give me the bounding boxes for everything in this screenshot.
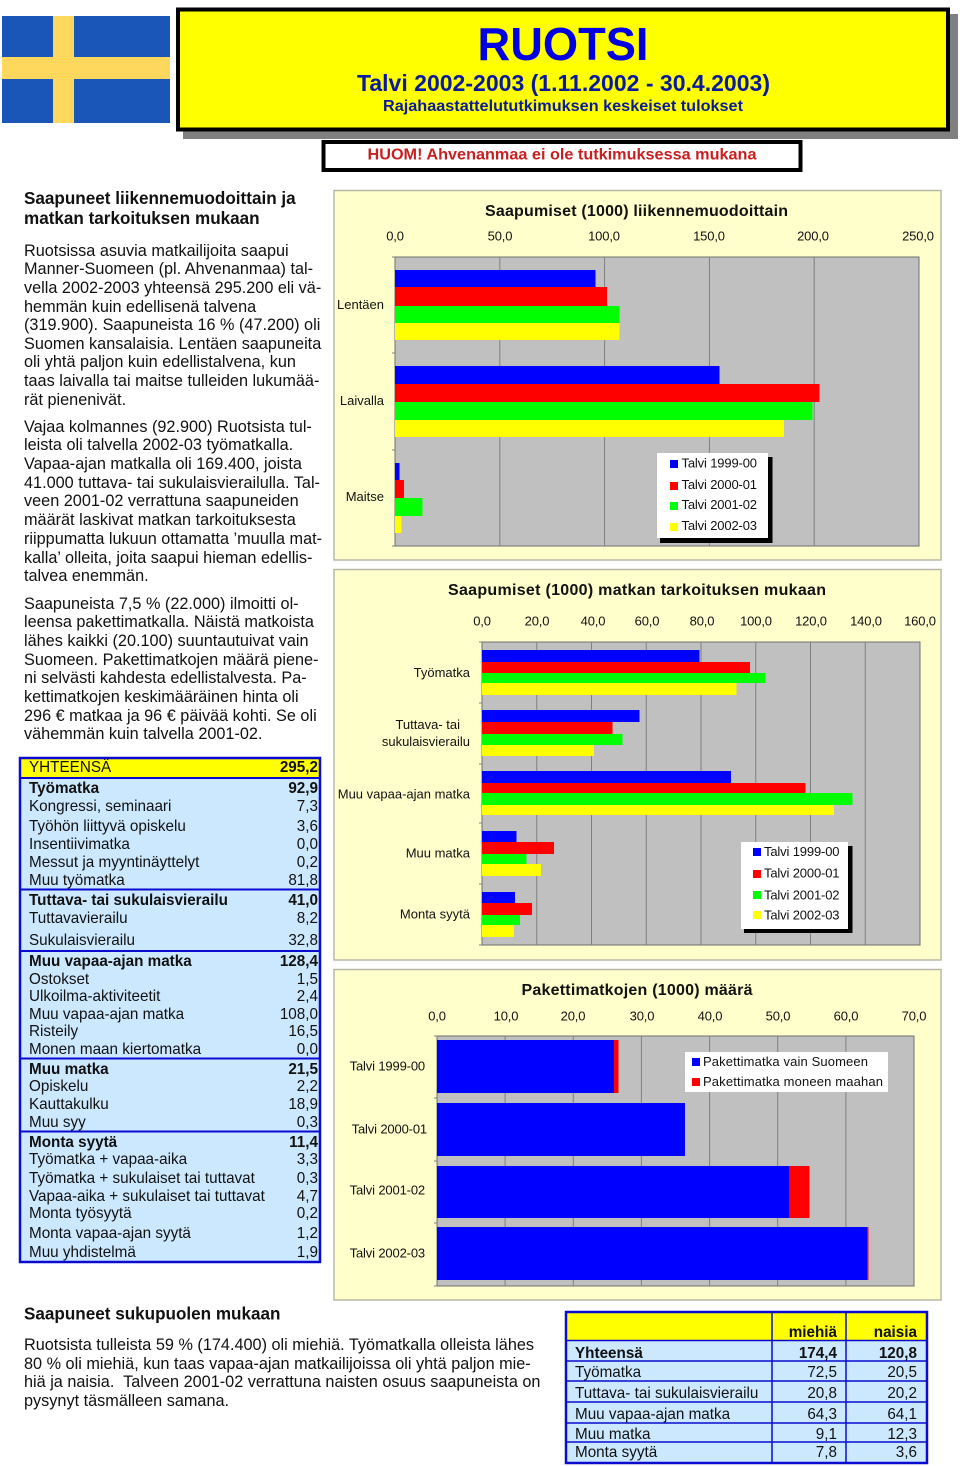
legend: Talvi 2002-03	[682, 518, 757, 533]
text block: arrivals by gender	[24, 1336, 540, 1410]
table: arrivals by purpose of travel: Insentiivimatka	[29, 836, 130, 853]
table: arrivals by purpose of travel: Messut ja myyntinäyttelyt	[29, 854, 200, 871]
table: arrivals by gender: 174,4	[799, 1345, 838, 1362]
table: arrivals by purpose of travel: Muu matka	[29, 1061, 109, 1078]
category labels	[350, 1058, 427, 1260]
notice box	[324, 142, 800, 170]
table: arrivals by purpose of travel: Vapaa-aika + sukulaiset tai tuttavat	[29, 1188, 266, 1205]
bars: Laivalla	[395, 366, 820, 437]
x axis labels: 10,0	[494, 1008, 518, 1024]
table: arrivals by gender: Työmatka	[575, 1364, 642, 1381]
x axis labels	[473, 614, 936, 628]
heading: arrivals by mode and purpose	[24, 189, 296, 228]
category labels: Työmatka	[414, 665, 471, 680]
heading: arrivals by gender: Saapuneet sukupuolen mukaan	[24, 1304, 280, 1324]
text block: travel purpose	[24, 418, 322, 585]
table: arrivals by gender: Yhteensä	[575, 1345, 643, 1362]
x axis labels: 30,0	[630, 1008, 654, 1024]
text block: travel purpose: Vajaa kolmannes (92.900) Ruotsista tul-	[24, 418, 312, 436]
text block: arrivals: (319.900). Saapuneista 16 % (47.200) oli	[24, 316, 320, 334]
legend: Talvi 1999-00	[764, 844, 839, 859]
category labels: Muu matka	[406, 846, 471, 860]
table: arrivals by purpose of travel: 295,2	[280, 759, 318, 776]
x axis labels: 200,0	[797, 228, 829, 244]
table: arrivals by purpose of travel: 1,2	[297, 1225, 318, 1242]
x axis labels: 80,0	[690, 614, 714, 628]
text block: travel purpose: 41.000 tuttava- tai sukulaisvierailulla. Tal-	[24, 474, 320, 492]
x axis labels: 0,0	[473, 614, 491, 628]
table: arrivals by purpose of travel: 32,8	[288, 932, 318, 949]
text block: package tours: vähemmän kuin talvella 2001-02.	[24, 725, 262, 743]
text block: arrivals: taas laivalla tai maitse tulleiden lukumää-	[24, 372, 319, 390]
table: arrivals by purpose of travel	[20, 758, 320, 1262]
table: arrivals by purpose of travel: Monta syytä	[29, 1134, 118, 1151]
x axis labels: 140,0	[850, 614, 882, 628]
x axis labels: 20,0	[525, 614, 549, 628]
table: arrivals by purpose of travel: Kongressi, seminaari	[29, 798, 171, 815]
category labels: Tuttava- tai	[395, 717, 460, 732]
text block: arrivals: vella 2002-2003 yhteensä 295.200 eli vä-	[24, 279, 321, 297]
table: arrivals by purpose of travel: 1,5	[297, 971, 318, 988]
table: arrivals by gender: 3,6	[896, 1444, 917, 1461]
table: arrivals by purpose of travel: Ostokset	[29, 971, 90, 988]
table: arrivals by purpose of travel: 108,0	[280, 1006, 318, 1023]
table: arrivals by purpose of travel: Monta vapaa-ajan syytä	[29, 1225, 191, 1242]
category labels: sukulaisvierailu	[382, 734, 470, 749]
bars: Talvi 2000-01	[437, 1103, 685, 1156]
table: arrivals by purpose of travel: Muu yhdistelmä	[29, 1244, 136, 1261]
table: arrivals by purpose of travel: Kauttakulku	[29, 1096, 109, 1113]
legend	[741, 842, 852, 933]
text block: package tours: ni selvästi kahdesta edellistalvesta. Pa-	[24, 669, 307, 687]
table: arrivals by purpose of travel: Sukulaisvierailu	[29, 932, 135, 949]
text block: package tours: Suomeen. Pakettimatkojen määrä piene-	[24, 651, 318, 669]
category labels: Laivalla	[340, 393, 385, 408]
table: arrivals by purpose of travel: 8,2	[297, 910, 318, 927]
x axis labels: 20,0	[561, 1008, 585, 1024]
category labels	[337, 297, 385, 504]
bars: Lentäen	[395, 270, 620, 340]
legend: Talvi 2001-02	[682, 497, 757, 512]
text block: arrivals: rät pienenivät.	[24, 391, 126, 409]
x axis labels: 250,0	[902, 228, 934, 244]
table: arrivals by purpose of travel: 0,0	[297, 1041, 318, 1058]
bars: Muu matka	[482, 831, 554, 876]
heading: arrivals by mode and purpose: Saapuneet liikennemuodoittain ja	[24, 189, 296, 208]
table: arrivals by purpose of travel: 1,9	[297, 1244, 318, 1261]
legend: Pakettimatka moneen maahan	[703, 1074, 883, 1089]
table: arrivals by purpose of travel: 4,7	[297, 1188, 318, 1205]
panel: chart arrivals by mode of transport	[334, 190, 941, 560]
table: arrivals by purpose of travel: Monta työsyytä	[29, 1205, 132, 1222]
notice box: HUOM! Ahvenanmaa ei ole tutkimuksessa mukana	[368, 146, 757, 164]
table: arrivals by gender: Muu vapaa-ajan matka	[575, 1406, 731, 1423]
table: arrivals by purpose of travel: 0,2	[297, 1205, 318, 1222]
table: arrivals by purpose of travel: 21,5	[288, 1061, 319, 1078]
table: arrivals by gender: 72,5	[807, 1364, 837, 1381]
x axis labels: 0,0	[428, 1008, 446, 1024]
text block: arrivals: hemmän kuin edellisenä talvena	[24, 298, 257, 316]
chart title: Saapumiset (1000) matkan tarkoituksen mukaan	[448, 582, 826, 599]
plot area	[479, 642, 920, 945]
bars: Talvi 2001-02	[437, 1166, 810, 1218]
table: arrivals by purpose of travel: Työmatka + sukulaiset tai tuttavat	[29, 1170, 256, 1187]
x axis labels: 50,0	[488, 228, 512, 244]
chart title: Saapumiset (1000) liikennemuodoittain	[485, 203, 788, 220]
text block: arrivals: oli yhtä paljon kuin edellistalvena, kun	[24, 353, 296, 371]
plot area	[392, 257, 919, 546]
table: arrivals by purpose of travel: Opiskelu	[29, 1078, 88, 1095]
x axis labels: 50,0	[766, 1008, 790, 1024]
table: arrivals by purpose of travel: Ulkoilma-aktiviteetit	[29, 988, 161, 1005]
category labels: Monta syytä	[400, 906, 471, 922]
plot area	[434, 1036, 914, 1286]
table: arrivals by gender: 7,8	[816, 1444, 837, 1461]
text block: arrivals by gender: pysynyt täsmälleen samana.	[24, 1392, 229, 1410]
table: arrivals by purpose of travel: Työmatka	[29, 780, 100, 797]
x axis labels: 60,0	[635, 614, 659, 628]
table: arrivals by purpose of travel: Muu syy	[29, 1114, 86, 1131]
legend	[685, 1052, 888, 1092]
x axis labels: 40,0	[698, 1008, 722, 1024]
bars: Talvi 1999-00	[437, 1040, 618, 1093]
table: arrivals by gender: naisia	[874, 1324, 918, 1341]
table: arrivals by gender: Monta syytä	[575, 1444, 658, 1461]
table: arrivals by purpose of travel: 16,5	[288, 1023, 318, 1040]
text block: travel purpose: leista oli talvella 2002-03 työmatkalla.	[24, 436, 293, 454]
table: arrivals by purpose of travel: Työhön liittyvä opiskelu	[29, 818, 186, 835]
text block: arrivals by gender: Ruotsista tulleista 59 % (174.400) oli miehiä. Työmatkalla olleista lähes	[24, 1336, 534, 1354]
text block: package tours: kettimatkojen keskimääräinen hinta oli	[24, 688, 299, 706]
heading: arrivals by mode and purpose: matkan tarkoituksen mukaan	[24, 209, 260, 228]
icon: Swedish flag	[2, 16, 170, 123]
table: arrivals by purpose of travel: 0,0	[297, 836, 318, 853]
table: arrivals by purpose of travel: Monen maan kiertomatka	[29, 1041, 202, 1058]
x axis labels: 100,0	[740, 614, 772, 628]
title banner: RUOTSI	[478, 18, 648, 70]
title banner: Talvi 2002-2003 (1.11.2002 - 30.4.2003)	[357, 70, 770, 96]
panel: chart arrivals by purpose of travel	[334, 570, 941, 960]
table: arrivals by gender: Tuttava- tai sukulaisvierailu	[575, 1385, 758, 1402]
table: arrivals by gender: Muu matka	[575, 1426, 651, 1443]
x axis labels	[428, 1008, 926, 1024]
table: arrivals by purpose of travel: 18,9	[288, 1096, 318, 1113]
text block: arrivals: Suomen kansalaisia. Lentäen saapuneita	[24, 335, 322, 353]
table: arrivals by purpose of travel: 7,3	[297, 798, 318, 815]
x axis labels: 160,0	[904, 614, 936, 628]
legend: Talvi 2001-02	[764, 888, 839, 902]
table: arrivals by purpose of travel: 2,2	[297, 1078, 318, 1095]
x axis labels: 120,0	[795, 614, 827, 628]
table: arrivals by purpose of travel: Tuttavavierailu	[29, 910, 128, 927]
table: arrivals by purpose of travel: 128,4	[280, 953, 319, 970]
x axis labels: 150,0	[693, 228, 725, 244]
x axis labels	[386, 228, 934, 244]
legend: Talvi 2000-01	[764, 866, 839, 880]
table: arrivals by purpose of travel: 3,6	[297, 818, 318, 835]
category labels: Talvi 2002-03	[350, 1246, 425, 1260]
category labels: Talvi 1999-00	[350, 1058, 425, 1074]
category labels: Muu vapaa-ajan matka	[338, 786, 471, 802]
text block: travel purpose: riippumatta lukuun ottamatta ’muulla mat-	[24, 530, 322, 548]
bars: Talvi 2002-03	[437, 1227, 868, 1280]
text block: travel purpose: Vapaa-ajan matkalla oli 169.400, joista	[24, 455, 303, 473]
text block: package tours: leensa pakettimatkalla. Näistä matkoista	[24, 613, 315, 631]
legend: Talvi 2002-03	[764, 908, 839, 922]
category labels: Lentäen	[337, 297, 384, 312]
text block: package tours: lähes kaikki (20.100) suuntautuivat vain	[24, 632, 309, 650]
bars: Tuttava- tai sukulaisvierailu	[482, 710, 640, 756]
table: arrivals by purpose of travel: 92,9	[288, 780, 318, 797]
text block: arrivals by gender: hiä ja naisia. Talveen 2001-02 verrattuna naisten osuus saapuneista on	[24, 1373, 540, 1391]
bars: Monta syytä	[482, 892, 532, 937]
legend: Pakettimatka vain Suomeen	[703, 1054, 868, 1069]
table: arrivals by purpose of travel: 0,2	[297, 854, 318, 871]
text block: arrivals by gender: 80 % oli miehiä, kun taas vapaa-ajan matkailijoissa oli yhtä paljon mie-	[24, 1355, 531, 1373]
table: arrivals by gender: 9,1	[816, 1426, 837, 1443]
table: arrivals by purpose of travel: Työmatka + vapaa-aika	[29, 1151, 188, 1168]
text block: arrivals	[24, 242, 322, 409]
table: arrivals by purpose of travel: Risteily	[29, 1023, 79, 1040]
table: arrivals by gender: 20,2	[887, 1385, 917, 1402]
table: arrivals by gender: 12,3	[887, 1426, 917, 1443]
category labels: Talvi 2001-02	[350, 1182, 425, 1198]
table: arrivals by gender: 20,8	[807, 1385, 837, 1402]
x axis labels: 60,0	[834, 1008, 858, 1024]
x axis labels: 100,0	[588, 228, 620, 244]
table: arrivals by purpose of travel: Muu työmatka	[29, 872, 125, 889]
x axis labels: 0,0	[386, 228, 404, 244]
table: arrivals by purpose of travel: 2,4	[297, 988, 319, 1005]
category labels	[338, 665, 471, 922]
text block: package tours: 296 € matkaa ja 96 € päivää kohti. Se oli	[24, 707, 317, 725]
table: arrivals by gender: miehiä	[789, 1324, 838, 1341]
table: arrivals by gender: 64,3	[807, 1406, 837, 1423]
table: arrivals by gender: 120,8	[879, 1345, 918, 1362]
text block: travel purpose: kalla’ olleita, joita saapui hieman edellis-	[24, 549, 312, 567]
text block: package tours: Saapuneista 7,5 % (22.000) ilmoitti ol-	[24, 595, 299, 613]
table: arrivals by purpose of travel: 0,3	[297, 1114, 318, 1131]
table: arrivals by purpose of travel: YHTEENSÄ	[29, 759, 112, 776]
text block: arrivals: Ruotsissa asuvia matkailijoita saapui	[24, 242, 289, 260]
category labels: Maitse	[346, 489, 384, 504]
chart title: Pakettimatkojen (1000) määrä	[522, 982, 753, 999]
text block: arrivals: Manner-Suomeen (pl. Ahvenanmaa) tal-	[24, 260, 313, 278]
text block: travel purpose: veen 2001-02 verrattuna saapuneiden	[24, 492, 299, 510]
table: arrivals by purpose of travel: Tuttava- tai sukulaisvierailu	[29, 892, 228, 909]
table: arrivals by purpose of travel: Muu vapaa-ajan matka	[29, 953, 192, 970]
table: arrivals by purpose of travel: 3,3	[297, 1151, 318, 1168]
table: arrivals by purpose of travel: 11,4	[289, 1134, 319, 1151]
bars: Työmatka	[482, 650, 766, 695]
title banner: Rajahaastattelututkimuksen keskeiset tulokset	[383, 98, 744, 115]
bars: Maitse	[395, 463, 422, 533]
x axis labels: 70,0	[902, 1008, 926, 1024]
table: arrivals by purpose of travel: 81,8	[288, 872, 318, 889]
text block: travel purpose: määrät laskivat matkan tarkoituksesta	[24, 511, 297, 529]
bars: Muu vapaa-ajan matka	[482, 771, 852, 815]
title banner	[178, 10, 958, 139]
text block: package tours	[24, 595, 318, 743]
table: arrivals by purpose of travel: Muu vapaa-ajan matka	[29, 1006, 185, 1023]
text block: travel purpose: talvea enemmän.	[24, 567, 149, 585]
table: arrivals by purpose of travel: 0,3	[297, 1170, 318, 1187]
x axis labels: 40,0	[581, 614, 605, 628]
panel: chart package tours	[334, 970, 941, 1300]
category labels: Talvi 2000-01	[352, 1122, 427, 1136]
legend: Talvi 1999-00	[682, 456, 757, 470]
table: arrivals by gender: 64,1	[887, 1406, 917, 1423]
table: arrivals by purpose of travel: 41,0	[288, 892, 318, 909]
legend	[657, 453, 772, 543]
legend: Talvi 2000-01	[682, 477, 757, 492]
table: arrivals by gender	[566, 1312, 927, 1463]
table: arrivals by gender: 20,5	[887, 1364, 917, 1381]
